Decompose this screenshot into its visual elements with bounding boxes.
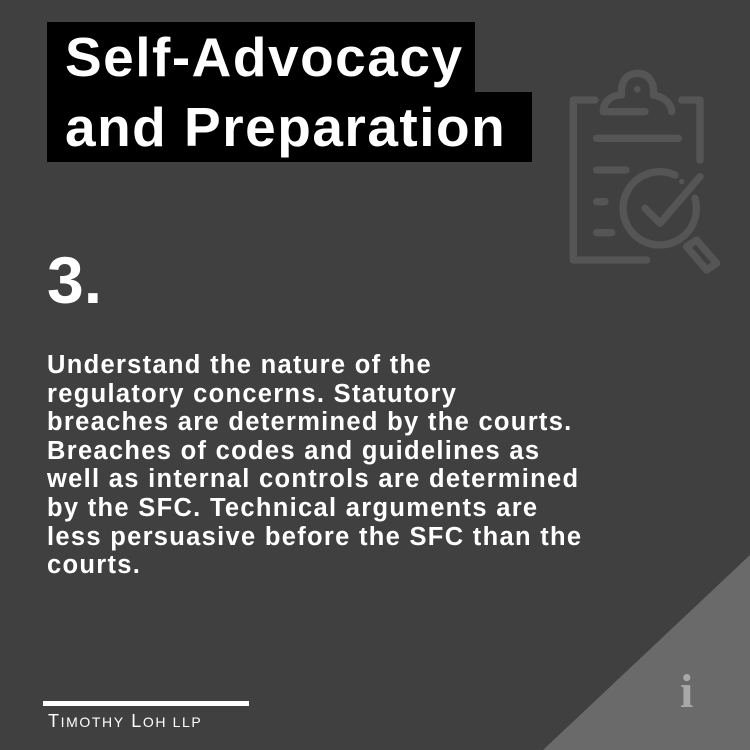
body text: by the SFC. Technical arguments are xyxy=(47,494,538,522)
title: Self-Advocacy xyxy=(65,26,464,88)
body text xyxy=(46,351,582,579)
body text: regulatory concerns. Statutory xyxy=(47,380,457,408)
body text: Breaches of codes and guidelines as xyxy=(47,437,540,465)
body text: well as internal controls are determined xyxy=(47,465,579,493)
logo xyxy=(43,701,249,731)
number: 3. xyxy=(47,243,102,317)
body text: courts. xyxy=(47,551,141,579)
icon: info: i xyxy=(680,665,693,718)
title xyxy=(47,22,532,162)
body text: Understand the nature of the xyxy=(47,351,432,379)
logo: TIMOTHY LOH LLP xyxy=(48,711,202,731)
body text: less persuasive before the SFC than the xyxy=(47,523,582,551)
body text: breaches are determined by the courts. xyxy=(47,408,573,436)
title: and Preparation xyxy=(65,96,506,158)
icon: clipboard with magnifier xyxy=(570,70,720,274)
